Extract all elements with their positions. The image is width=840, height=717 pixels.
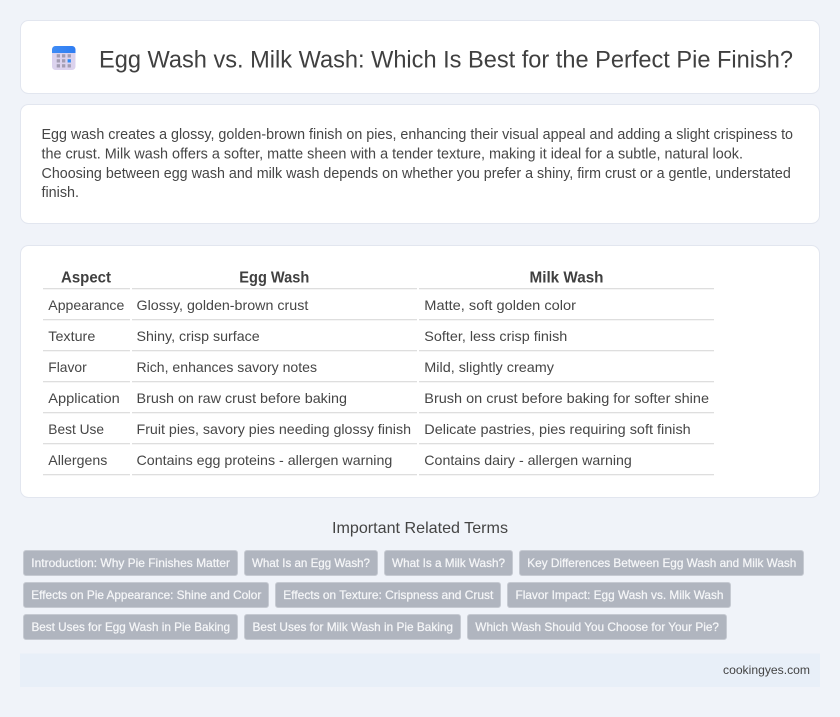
row: appearance: Appearance bbox=[48, 297, 125, 313]
row: flavor bbox=[48, 359, 554, 375]
tag: Flavor Impact: Egg Wash vs. Milk Wash bbox=[516, 588, 724, 602]
footer source: cookingyes.com bbox=[723, 663, 810, 677]
tag list: related terms bbox=[24, 550, 804, 640]
row: allergens: Contains egg proteins - allergen warning bbox=[136, 452, 392, 468]
tag bbox=[276, 582, 500, 608]
row: best use: Fruit pies, savory pies needing glossy finish bbox=[136, 421, 411, 437]
row: application bbox=[48, 390, 709, 406]
panel: summary paragraph bbox=[20, 104, 820, 224]
row: best use: Best Use bbox=[48, 421, 104, 437]
row: appearance: Matte, soft golden color bbox=[424, 297, 576, 313]
row: allergens: Contains dairy - allergen warning bbox=[424, 452, 632, 468]
table header row: Aspect bbox=[61, 270, 112, 287]
row: application: Application bbox=[48, 390, 120, 406]
row: appearance: Glossy, golden-brown crust bbox=[136, 297, 308, 313]
row: flavor: Mild, slightly creamy bbox=[424, 359, 554, 375]
panel: summary paragraph: Choosing between egg wash and milk wash depends on whether you prefer a shiny, firm crust or a gentle, understated bbox=[42, 166, 791, 182]
tag: Key Differences Between Egg Wash and Milk Wash bbox=[527, 556, 796, 570]
tag bbox=[244, 614, 460, 640]
footer bar bbox=[20, 654, 820, 687]
tag bbox=[24, 614, 238, 640]
row: application: Brush on crust before baking for softer shine bbox=[424, 390, 709, 406]
tag: Effects on Texture: Crispness and Crust bbox=[283, 588, 494, 602]
table header row bbox=[61, 270, 604, 287]
row: texture bbox=[48, 328, 567, 344]
tag bbox=[508, 582, 730, 608]
row: texture: Shiny, crisp surface bbox=[136, 328, 260, 344]
row: appearance bbox=[48, 297, 576, 313]
row: best use bbox=[48, 421, 691, 437]
tag: Best Uses for Egg Wash in Pie Baking bbox=[32, 620, 230, 634]
title: Egg Wash vs. Milk Wash: Which Is Best for the Perfect Pie Finish? bbox=[99, 47, 793, 74]
tag bbox=[244, 550, 378, 576]
heading: important related terms: Important Related Terms bbox=[332, 520, 508, 537]
icon: calendar bbox=[52, 46, 76, 70]
row: allergens: Allergens bbox=[48, 452, 107, 468]
tag bbox=[520, 550, 804, 576]
row: flavor: Rich, enhances savory notes bbox=[136, 359, 317, 375]
tag: What Is an Egg Wash? bbox=[252, 556, 370, 570]
tag: Best Uses for Milk Wash in Pie Baking bbox=[252, 620, 453, 634]
tag bbox=[468, 614, 726, 640]
row: application: Brush on raw crust before baking bbox=[136, 390, 347, 406]
tag: What Is a Milk Wash? bbox=[392, 556, 505, 570]
panel: summary paragraph: Egg wash creates a glossy, golden-brown finish on pies, enhancing their visual appeal and adding a slight crispiness to bbox=[42, 127, 793, 143]
panel: summary paragraph: the crust. Milk wash offers a softer, matte sheen with a tender texture, making it ideal for a subtle, natural look. bbox=[42, 146, 743, 162]
row: texture: Softer, less crisp finish bbox=[424, 328, 567, 344]
tag bbox=[24, 582, 268, 608]
header panel bbox=[20, 20, 820, 94]
table header row: Milk Wash bbox=[530, 270, 604, 287]
tag: Introduction: Why Pie Finishes Matter bbox=[31, 556, 230, 570]
tag bbox=[384, 550, 512, 576]
table header row: Egg Wash bbox=[239, 270, 309, 287]
tag: Effects on Pie Appearance: Shine and Color bbox=[31, 588, 261, 602]
tag: Which Wash Should You Choose for Your Pie? bbox=[475, 620, 719, 634]
row: allergens bbox=[48, 452, 632, 468]
panel: summary paragraph: finish. bbox=[42, 185, 79, 201]
panel: comparison table bbox=[20, 246, 820, 498]
tag bbox=[24, 550, 238, 576]
row: flavor: Flavor bbox=[48, 359, 87, 375]
row: best use: Delicate pastries, pies requiring soft finish bbox=[424, 421, 691, 437]
row: texture: Texture bbox=[48, 328, 96, 344]
